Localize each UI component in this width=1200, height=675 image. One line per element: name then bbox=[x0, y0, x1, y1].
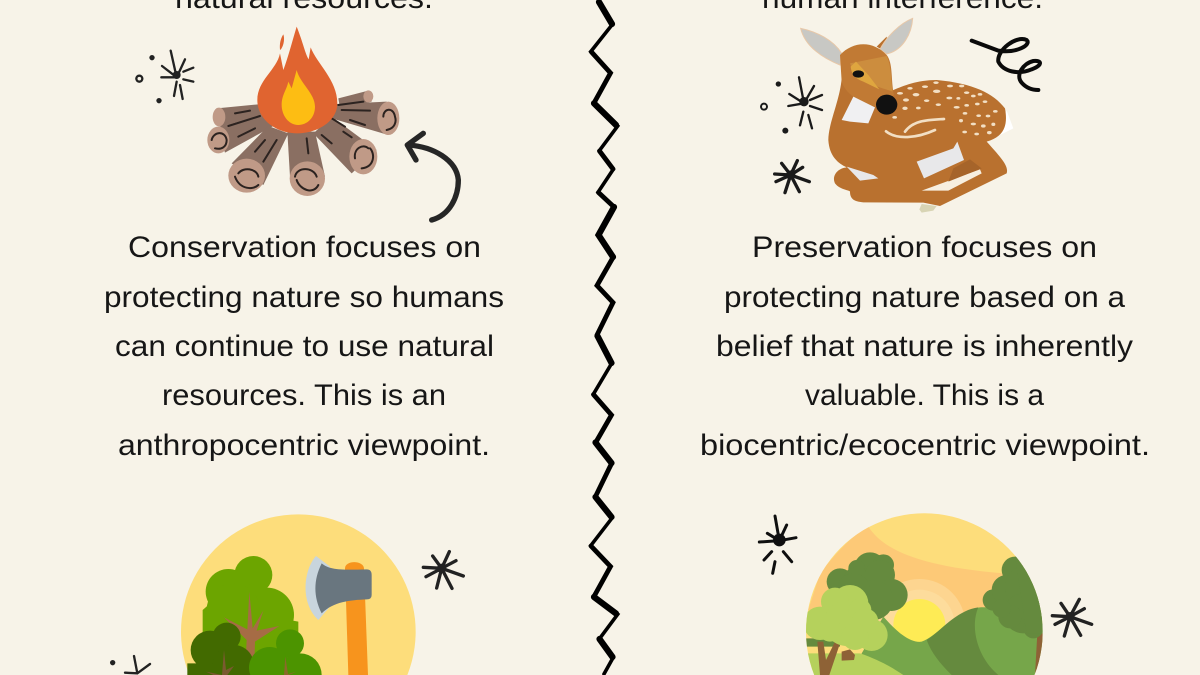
trees bbox=[187, 556, 322, 675]
sun bbox=[893, 599, 946, 642]
icon: deer bbox=[801, 18, 1013, 213]
icon: sparkles beside deer bbox=[761, 77, 822, 193]
left paragraph: protecting nature so humans bbox=[104, 281, 504, 314]
light tree bbox=[803, 585, 888, 651]
dark tree behind bbox=[827, 552, 908, 620]
icon: sparkle left top bbox=[136, 51, 193, 103]
orange sky band bbox=[808, 527, 1002, 612]
sun halos bbox=[878, 579, 964, 622]
tail bbox=[997, 111, 1013, 135]
logs bbox=[207, 90, 399, 196]
eye bbox=[853, 70, 864, 78]
green hills bbox=[860, 607, 1047, 675]
chest white bbox=[842, 97, 875, 123]
head bbox=[840, 44, 894, 107]
body stripes bbox=[886, 119, 944, 137]
left paragraph bbox=[104, 231, 504, 462]
ears bbox=[801, 28, 842, 65]
icon: landscape badge bbox=[803, 510, 1048, 675]
icon: curved arrow bbox=[407, 133, 458, 220]
white belly bbox=[917, 142, 964, 178]
nose bbox=[876, 95, 897, 115]
axe head bbox=[315, 563, 372, 613]
left paragraph: Conservation focuses on bbox=[128, 231, 481, 264]
icon: squiggle bbox=[972, 39, 1040, 90]
icon: axe and trees badge bbox=[181, 514, 416, 675]
axe blade edge bbox=[306, 556, 330, 620]
trunks bbox=[817, 642, 840, 675]
right paragraph: Preservation focuses on bbox=[752, 231, 1097, 264]
body bbox=[828, 78, 1007, 206]
sky bbox=[803, 510, 1047, 675]
right paragraph: biocentric/ecocentric viewpoint. bbox=[700, 429, 1150, 462]
zigzag centre divider bbox=[591, 1, 618, 674]
axe handle bbox=[345, 562, 368, 675]
inner flame bbox=[282, 70, 315, 125]
hoof bbox=[919, 204, 937, 213]
right dark tree bbox=[983, 557, 1048, 638]
icon: sparkle upper left of landscape bbox=[759, 516, 796, 573]
dark tree bbox=[213, 623, 241, 651]
icon: sparkle right of landscape bbox=[1052, 599, 1092, 636]
light foreground bbox=[803, 653, 903, 675]
right tree trunk bbox=[1035, 634, 1043, 674]
leg shadow bbox=[948, 159, 982, 182]
spots bbox=[892, 81, 998, 135]
right paragraph: protecting nature based on a bbox=[724, 281, 1125, 314]
right paragraph: valuable. This is a bbox=[805, 379, 1044, 412]
mid tree bbox=[276, 629, 304, 657]
left paragraph: anthropocentric viewpoint. bbox=[118, 429, 490, 462]
outer flame bbox=[257, 27, 337, 133]
right paragraph bbox=[700, 231, 1150, 462]
icon: sparkle lower left bbox=[110, 656, 150, 673]
left paragraph: resources. This is an bbox=[162, 379, 446, 412]
icon: campfire bbox=[207, 27, 399, 196]
back tree bbox=[203, 605, 298, 675]
left paragraph: can continue to use natural bbox=[115, 330, 494, 363]
icon: sparkle near axe bbox=[423, 552, 463, 588]
right paragraph: belief that nature is inherently bbox=[716, 330, 1133, 363]
